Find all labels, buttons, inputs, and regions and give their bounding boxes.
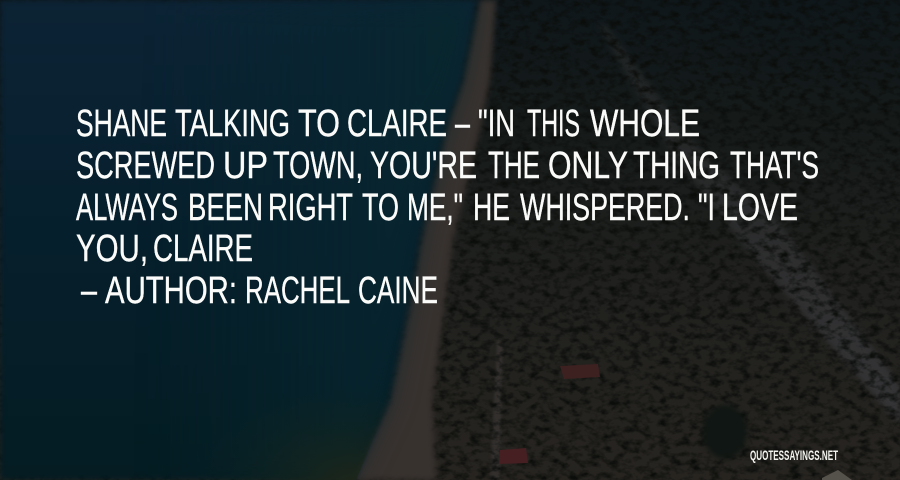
side track xyxy=(490,340,503,480)
quote line 2: SCREWED xyxy=(76,145,215,187)
quote line 2: THAT'S xyxy=(730,145,819,187)
quote line 1: TALKING xyxy=(175,103,290,145)
author attribution: CAINE xyxy=(358,270,438,312)
quote line 3: TO xyxy=(362,187,399,229)
quote line 3: RIGHT xyxy=(268,187,353,229)
quote line 4 xyxy=(76,228,253,270)
quote line 3: "I xyxy=(698,187,715,229)
quote line 3: BEEN xyxy=(188,187,263,229)
quote line 3 xyxy=(76,187,798,229)
quote line 2: TOWN, xyxy=(273,145,363,187)
quote line 3: HE xyxy=(473,187,510,229)
quote line 2 xyxy=(76,145,819,187)
quote line 3: ALWAYS xyxy=(76,187,178,229)
quote line 1: – xyxy=(455,103,471,145)
author attribution: RACHEL xyxy=(245,270,350,312)
quote line 2: ONLY xyxy=(548,145,628,187)
lower red roof xyxy=(499,448,528,464)
quote line 4: YOU, xyxy=(76,228,148,270)
quote line 1: SHANE xyxy=(76,103,167,145)
quote line 3: LOVE xyxy=(722,187,798,229)
author attribution: – xyxy=(81,270,98,312)
red roof xyxy=(560,364,600,379)
author attribution xyxy=(81,270,438,312)
quote line 3: ME," xyxy=(407,187,463,229)
quote line 1: WHOLE xyxy=(590,103,700,145)
road xyxy=(598,25,900,425)
pale roof xyxy=(822,470,852,480)
quote line 1: THIS xyxy=(527,103,580,145)
quote line 1: "IN xyxy=(478,103,515,145)
quote line 1: CLAIRE xyxy=(347,103,447,145)
beach xyxy=(352,0,496,480)
author attribution: AUTHOR: xyxy=(105,270,237,312)
quote line 3: WHISPERED. xyxy=(520,187,690,229)
quote line 2: THE xyxy=(488,145,540,187)
sea xyxy=(0,0,476,480)
quote line 2: YOU'RE xyxy=(370,145,477,187)
quote line 1: TO xyxy=(298,103,340,145)
watermark: QUOTESSAYINGS.NET xyxy=(750,448,838,463)
quote text xyxy=(76,103,819,312)
dark tree patch xyxy=(703,405,747,459)
quote line 1 xyxy=(76,103,700,145)
quote line 2: UP xyxy=(223,145,268,187)
quote line 2: THING xyxy=(633,145,720,187)
quote line 4: CLAIRE xyxy=(153,228,253,270)
